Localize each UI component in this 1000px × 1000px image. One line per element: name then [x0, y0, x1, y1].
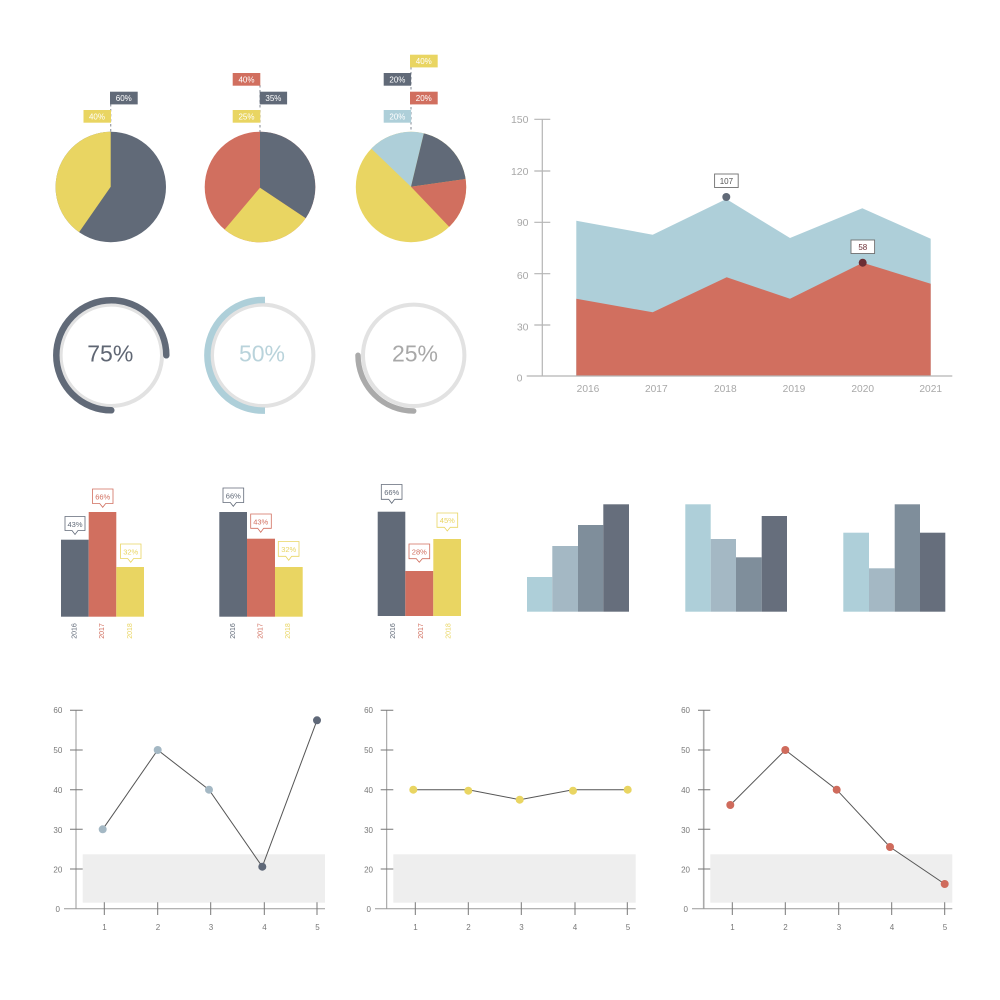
- data line: [409, 786, 632, 804]
- x axis labels: 2016: [577, 384, 600, 395]
- shaded band: [710, 854, 952, 903]
- year labels: [230, 623, 292, 639]
- y axis labels: 60: [517, 270, 529, 282]
- label: 20% blue: 20%: [389, 112, 405, 121]
- blue area: [576, 199, 931, 376]
- x axis labels: 2018: [714, 384, 737, 395]
- label: 40%: 40%: [89, 112, 105, 121]
- axis labels: 50: [681, 746, 691, 755]
- axis labels: 3: [209, 923, 214, 932]
- shaded band: [393, 854, 636, 903]
- axis labels: 40: [364, 786, 374, 795]
- y axis labels: 30: [517, 322, 529, 334]
- label: 35%: [260, 92, 287, 104]
- panel: blue bars rising: [527, 504, 629, 612]
- axis labels: [364, 706, 631, 932]
- axis labels: 60: [681, 706, 691, 715]
- callout: 58: [851, 240, 875, 267]
- label: 20% dark: 20%: [389, 75, 405, 84]
- axis labels: 0: [367, 905, 372, 914]
- ring: 50%: [207, 300, 313, 411]
- axis labels: 20: [53, 866, 63, 874]
- axis labels: 2: [466, 923, 471, 932]
- label: 25%: [233, 110, 260, 123]
- ring: 75%: [56, 300, 166, 410]
- year labels: 2017: [258, 623, 264, 639]
- axis labels: 1: [730, 923, 735, 932]
- panel: bar chart group 2: [219, 488, 303, 639]
- x axis labels: 2017: [645, 384, 668, 395]
- axis labels: 0: [56, 905, 61, 914]
- callout: 32%: 32%: [123, 548, 139, 556]
- callout: 32%: [120, 544, 141, 562]
- axis labels: 50: [364, 746, 374, 755]
- label: 25%: 25%: [238, 112, 255, 121]
- label: 20% dark: [384, 73, 411, 86]
- axis labels: 5: [315, 923, 320, 932]
- axis labels: 30: [681, 826, 691, 835]
- year labels: 2016: [230, 623, 237, 639]
- axis labels: 0: [684, 905, 689, 914]
- axis labels: 20: [364, 866, 374, 874]
- callout: 107: 107: [720, 177, 734, 186]
- year labels: 2016: [72, 623, 78, 639]
- axis labels: 60: [364, 706, 374, 715]
- axis labels: 60: [53, 706, 63, 715]
- axis labels: 4: [573, 923, 578, 932]
- bars: [219, 512, 303, 617]
- callout: 66%: 66%: [95, 492, 111, 502]
- callout: 43%: 43%: [67, 520, 83, 529]
- callout: 66%: 66%: [384, 488, 400, 497]
- year labels: 2018: [285, 623, 292, 639]
- y axis labels: 120: [511, 166, 529, 178]
- panel: blue bars dip: [685, 504, 787, 612]
- y axis labels: 150: [511, 114, 529, 126]
- panel: line chart 1: [53, 706, 325, 932]
- x axis labels: 2021: [919, 384, 942, 395]
- label: 60%: 60%: [116, 94, 132, 103]
- axis labels: 2: [783, 923, 788, 932]
- bars: [378, 512, 461, 616]
- x axis labels: 2020: [851, 384, 874, 395]
- panel: area chart: [511, 114, 952, 395]
- red area: [576, 263, 931, 376]
- callout: 43%: [251, 514, 271, 532]
- panel: line chart 3: [681, 706, 952, 932]
- panel: blue bars mixed: [843, 504, 945, 612]
- bars: [61, 512, 144, 617]
- callout: 107: [715, 174, 738, 201]
- year labels: [390, 623, 452, 639]
- label: 60%: [110, 92, 138, 104]
- axis labels: 1: [102, 923, 107, 932]
- callout: 66%: [92, 489, 113, 507]
- callout: 66%: [223, 488, 244, 506]
- shaded band: [83, 854, 325, 903]
- ring: 25%: [358, 305, 464, 411]
- label: 40%: [233, 73, 260, 86]
- panel: pie charts: [56, 54, 466, 242]
- infographic canvas: [53, 54, 952, 930]
- callout: 66%: [381, 484, 402, 503]
- axis labels: 2: [156, 923, 161, 932]
- callout: 28%: [409, 544, 430, 562]
- pie chart 1: [56, 92, 166, 242]
- data line: [99, 716, 321, 871]
- callout: 43%: 43%: [253, 517, 269, 526]
- data line: [726, 746, 949, 888]
- axis labels: 1: [413, 923, 418, 932]
- callout: 43%: [65, 516, 85, 534]
- year labels: 2017: [99, 623, 106, 639]
- axes: [375, 710, 636, 915]
- ring: 75%: 75%: [87, 340, 133, 366]
- year labels: 2017: [418, 623, 425, 639]
- pie chart 2: [204, 73, 316, 242]
- axis labels: 5: [943, 923, 948, 932]
- callout: 28%: 28%: [412, 548, 427, 556]
- x axis labels: 2019: [783, 384, 806, 395]
- year labels: 2016: [390, 623, 397, 639]
- axis labels: 40: [681, 786, 691, 795]
- year labels: 2018: [446, 623, 452, 639]
- axis labels: [53, 706, 320, 932]
- axis labels: 40: [53, 786, 63, 795]
- label: 40%: [84, 110, 111, 123]
- axis labels: 5: [626, 923, 631, 932]
- label: 40%: 40%: [416, 57, 432, 66]
- callout: 45%: 45%: [440, 516, 455, 525]
- callout: 32%: [278, 542, 299, 560]
- axis labels: 30: [53, 826, 63, 835]
- ring: 50%: 50%: [239, 340, 285, 366]
- label: 40%: 40%: [238, 75, 255, 84]
- label: 40%: [410, 55, 438, 67]
- y axis labels: 0: [517, 372, 523, 384]
- year labels: 2018: [127, 623, 134, 639]
- callout: 32%: 32%: [281, 545, 297, 554]
- axes: [692, 710, 952, 915]
- panel: line chart 2: [364, 706, 636, 932]
- y axis labels: 90: [517, 217, 529, 229]
- axis labels: 4: [262, 923, 267, 932]
- axis labels: 20: [681, 866, 691, 874]
- ring: 25%: 25%: [392, 340, 438, 366]
- callout: 58: 58: [858, 243, 868, 252]
- label: 20% red: 20%: [416, 94, 432, 103]
- x axis labels: [577, 384, 942, 395]
- label: 20% red: [410, 92, 438, 104]
- panel: bar chart group 1: [61, 489, 144, 639]
- year labels: [72, 623, 134, 639]
- callout: 45%: [437, 513, 458, 531]
- panel: bar chart group 3: [378, 484, 461, 639]
- callout: 66%: 66%: [226, 492, 241, 500]
- label: 20% blue: [384, 110, 411, 123]
- panel: progress rings: [56, 300, 464, 411]
- y axis labels: [511, 114, 529, 384]
- axis labels: 4: [890, 923, 895, 932]
- label: 35%: 35%: [265, 94, 281, 103]
- axis labels: [681, 706, 948, 932]
- axis labels: 3: [837, 923, 842, 932]
- axis labels: 3: [519, 923, 524, 932]
- pie chart 3: [356, 54, 466, 242]
- axis labels: 50: [53, 746, 63, 755]
- axes: [527, 119, 952, 376]
- axis labels: 30: [364, 826, 374, 835]
- axes: [64, 710, 325, 915]
